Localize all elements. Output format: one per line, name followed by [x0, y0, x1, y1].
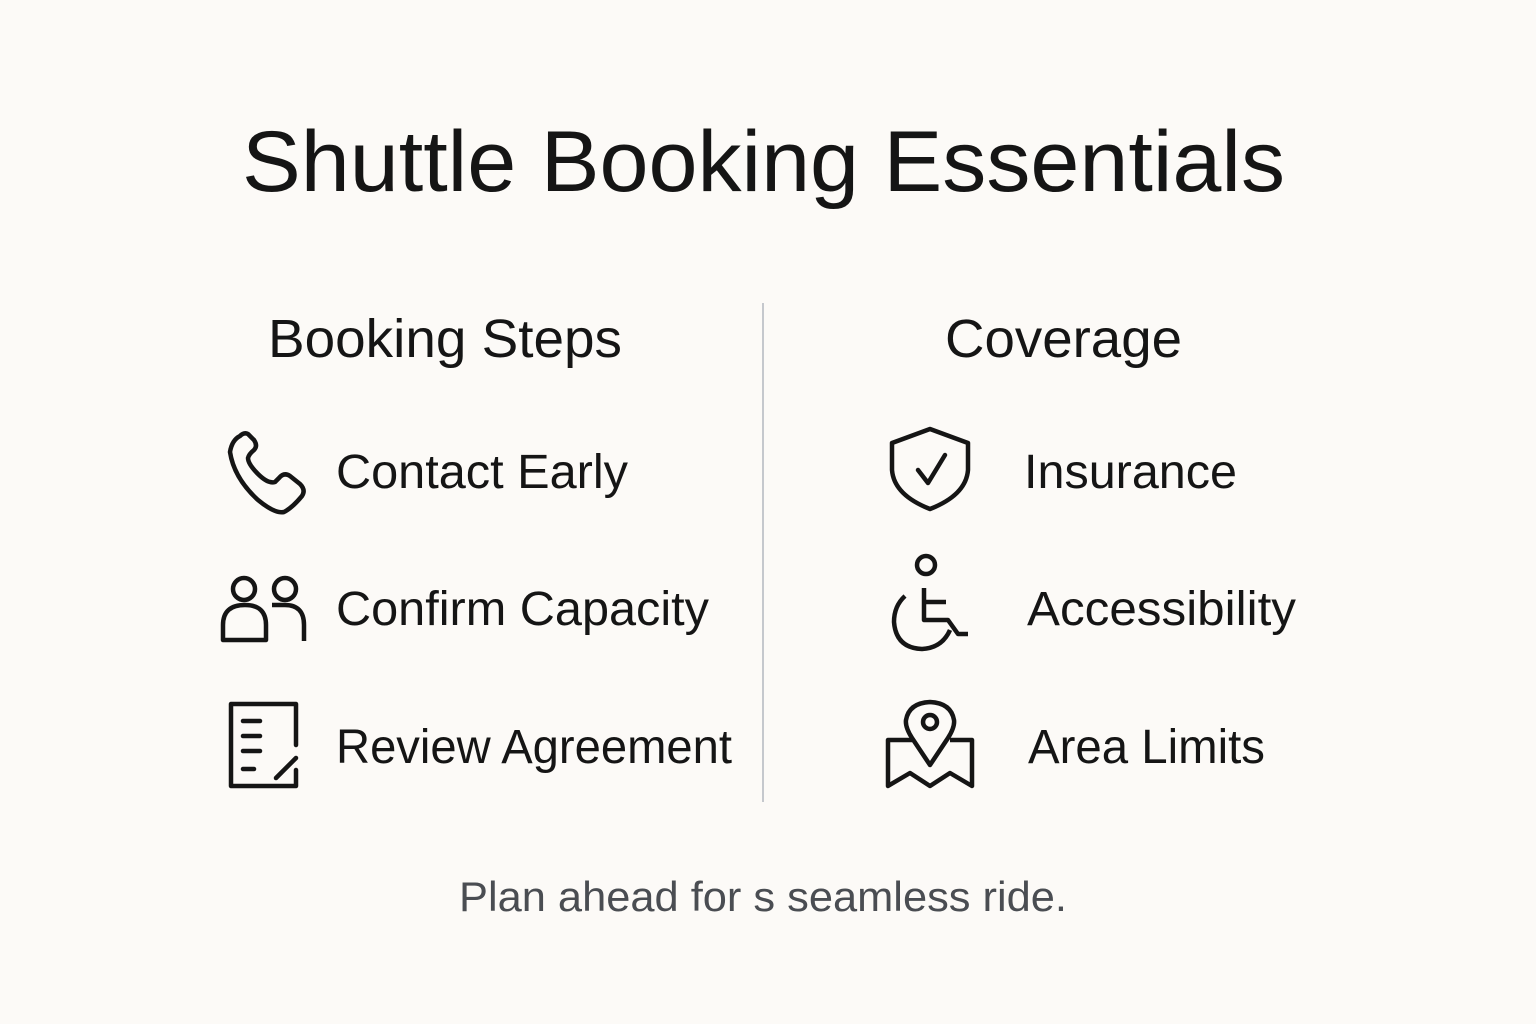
icon: wheelchair: [894, 556, 968, 649]
title: Shuttle Booking Essentials: [242, 114, 1285, 210]
panel: coverage: [888, 429, 1296, 786]
heading: booking steps: Booking Steps: [268, 309, 622, 369]
divider: [762, 303, 764, 802]
icon: map pin: [888, 702, 972, 786]
text: accessibility: Accessibility: [1027, 583, 1296, 636]
icon: people: [223, 578, 304, 641]
heading: coverage: Coverage: [945, 309, 1182, 369]
text: insurance: Insurance: [1024, 446, 1237, 499]
icon: phone: [230, 433, 304, 512]
icon: shield check: [892, 429, 968, 509]
text: confirm capacity: Confirm Capacity: [336, 583, 709, 636]
panel: booking steps: [223, 433, 732, 786]
footer text: Plan ahead for s seamless ride.: [459, 873, 1067, 920]
icon: document with pen: [231, 704, 296, 786]
text: contact early: Contact Early: [336, 446, 628, 499]
text: review agreement: Review Agreement: [336, 721, 732, 774]
text: area limits: Area Limits: [1028, 721, 1265, 774]
